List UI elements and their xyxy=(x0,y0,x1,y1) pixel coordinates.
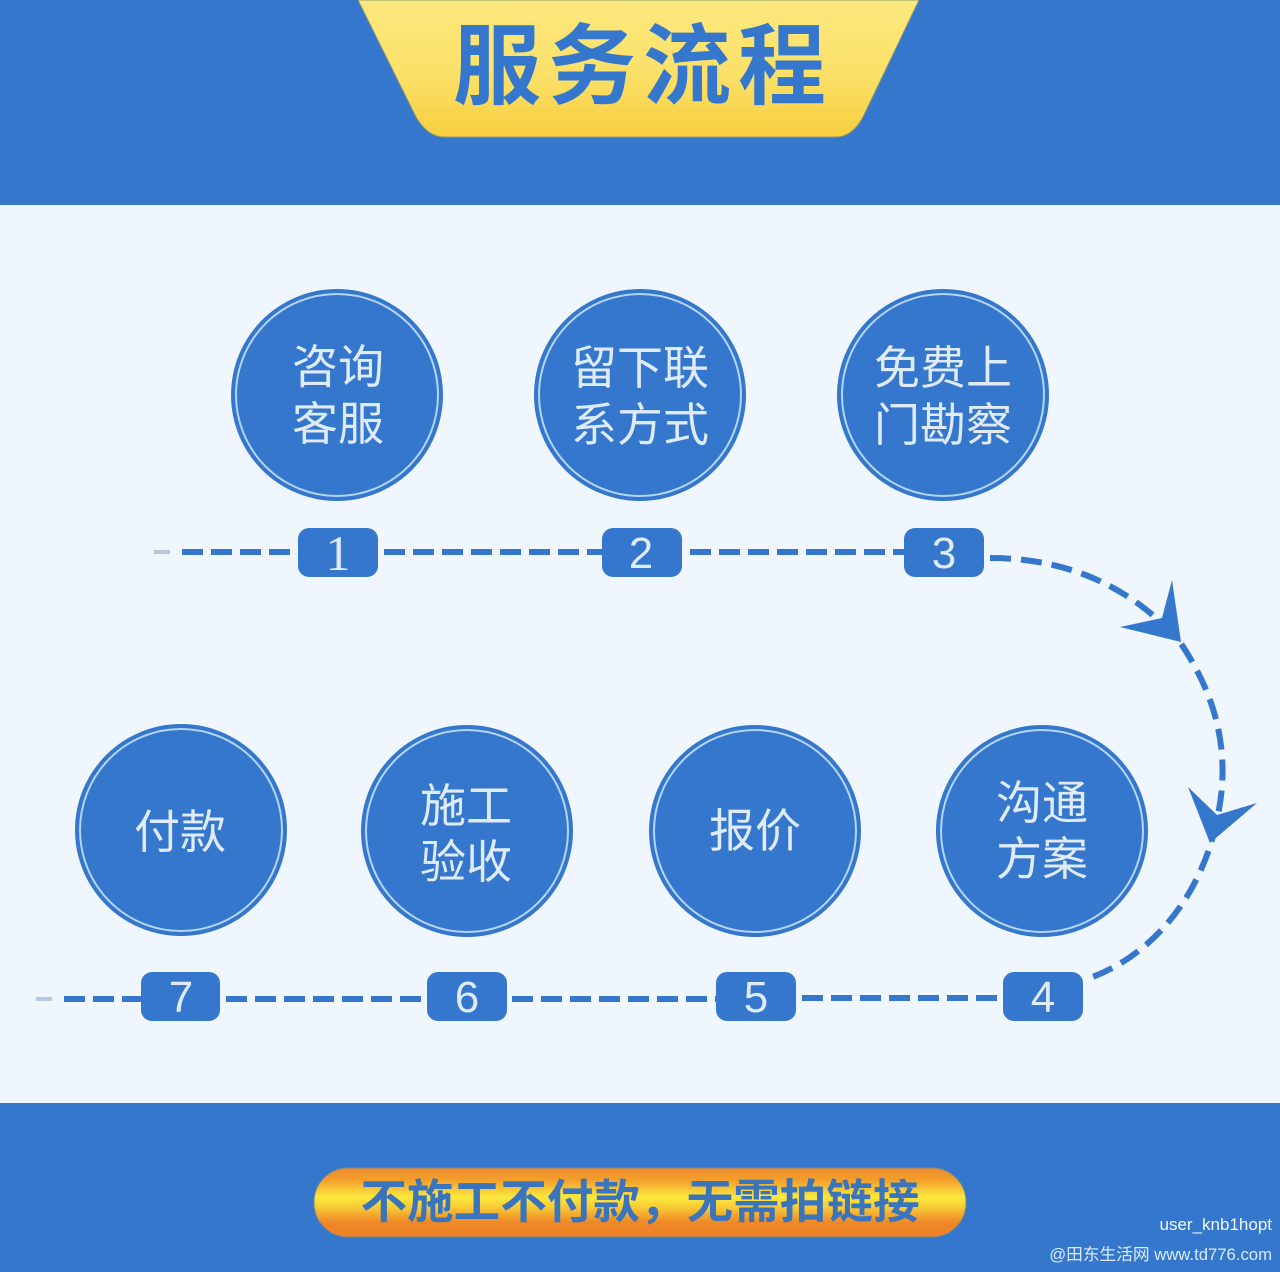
number badge 1 xyxy=(298,525,378,581)
number badge 2 xyxy=(602,528,682,578)
pill text: 不施工不付款，无需拍链接 xyxy=(360,1176,920,1228)
arrow head upper xyxy=(1120,580,1181,642)
step circle 5 xyxy=(649,725,861,937)
number badge 5: 5 xyxy=(744,973,768,1022)
step circle 2: 系方式 xyxy=(571,399,709,451)
step circle 3 xyxy=(837,289,1049,501)
step circle 6: 验收 xyxy=(420,836,512,888)
bottom pill banner xyxy=(314,1168,966,1237)
number badge 7: 7 xyxy=(169,973,193,1022)
bottom blue band xyxy=(0,1103,1280,1272)
dashed curve to arrows xyxy=(990,558,1223,980)
step circle 4: 沟通 xyxy=(996,777,1088,829)
number badge 6 xyxy=(427,972,507,1022)
watermark: @田东生活网 www.td776.com xyxy=(1049,1245,1272,1264)
number badge 6: 6 xyxy=(455,973,479,1022)
title banner xyxy=(358,0,919,137)
watermark xyxy=(1049,1215,1272,1264)
step circle 6: 施工 xyxy=(420,780,512,832)
number badge 2: 2 xyxy=(629,529,653,578)
dashed path top row xyxy=(154,550,904,554)
step circle 5: 报价 xyxy=(709,805,801,857)
number badge 3 xyxy=(904,528,984,578)
number badge 4: 4 xyxy=(1031,973,1055,1022)
step circle 2 xyxy=(534,289,746,501)
number badge 4 xyxy=(1003,972,1083,1022)
top blue band xyxy=(0,0,1280,205)
step circle 3: 门勘察 xyxy=(874,399,1012,451)
watermark: user_knb1hopt xyxy=(1160,1215,1272,1234)
step circle 6 xyxy=(361,725,573,937)
number badge 1: 1 xyxy=(326,525,350,581)
number badge 5 xyxy=(716,972,796,1022)
step circle 7: 付款 xyxy=(134,806,226,858)
step circle 1: 咨询 xyxy=(292,341,384,393)
step circle 1 xyxy=(231,289,443,501)
step circle 3: 免费上 xyxy=(874,342,1012,394)
number badge 7 xyxy=(141,972,220,1022)
step circle 4: 方案 xyxy=(996,833,1088,885)
title: 服务流程 xyxy=(453,17,833,116)
dashed path bottom row xyxy=(36,998,1003,999)
step circle 4 xyxy=(936,725,1148,937)
step circle 1: 客服 xyxy=(292,398,384,450)
number badge 3: 3 xyxy=(932,529,956,578)
step circle 2: 留下联 xyxy=(571,342,709,394)
step circle 7 xyxy=(75,724,287,936)
arrow head lower xyxy=(1188,787,1257,843)
